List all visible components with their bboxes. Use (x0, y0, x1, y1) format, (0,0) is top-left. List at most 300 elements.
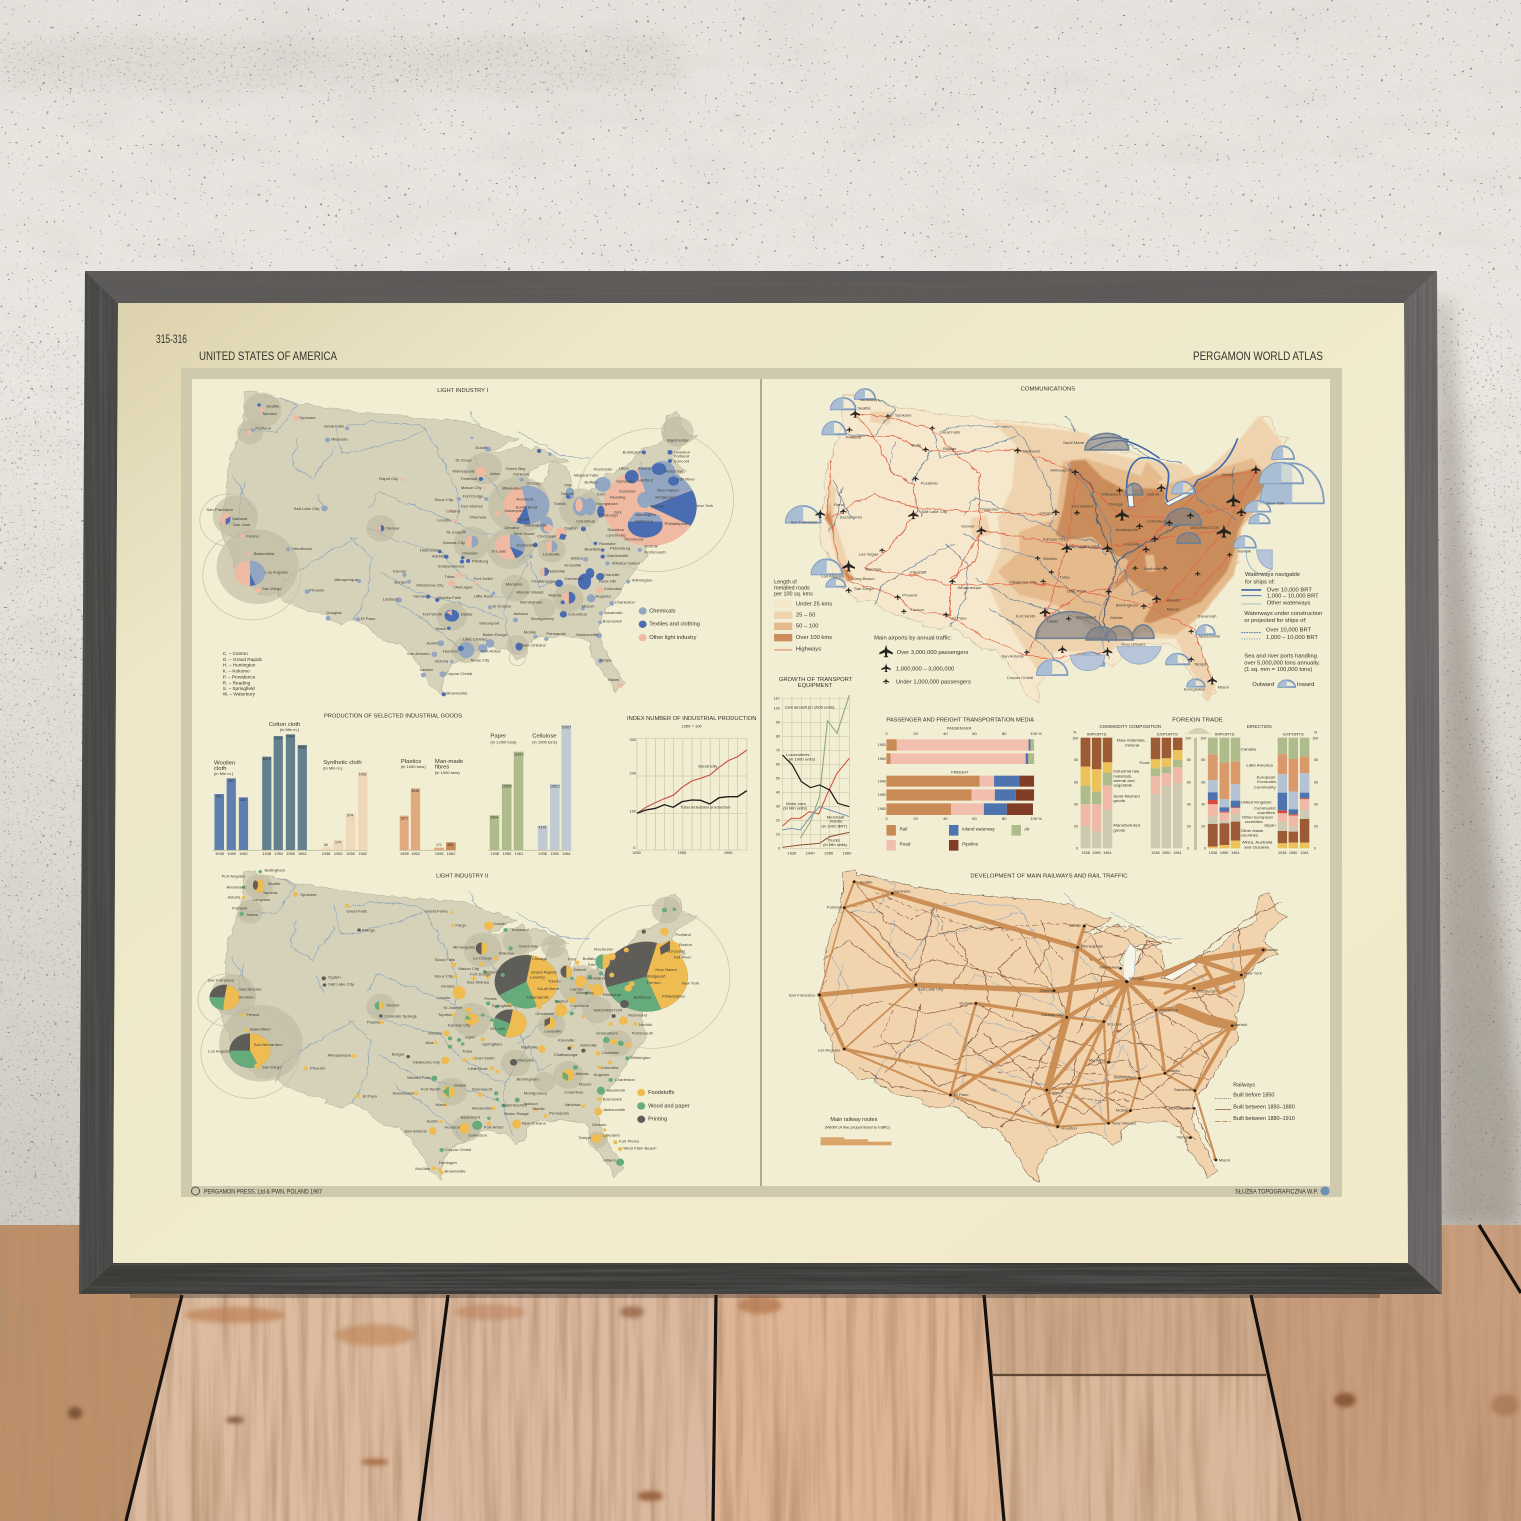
chart: growth of transport equipment: 30 (776, 805, 780, 809)
city labels: Borger (394, 579, 408, 584)
city labels: Oklahoma City (416, 583, 444, 588)
chart: foreign trade: IMPORTS (1215, 732, 1235, 736)
foreign trade labels: European (1257, 775, 1276, 779)
city labels: Lincoln (437, 995, 450, 1000)
city labels: Corpus Christi (446, 671, 472, 676)
legend: waterways: Over 10,000 BRT (1267, 587, 1313, 593)
city labels: Springfield (492, 1003, 511, 1008)
city labels: Bellingham (265, 868, 286, 873)
legend: waterways: or projected for ships of: (1244, 618, 1307, 624)
year labels: 1961 (514, 852, 523, 856)
pie: Baltimore and neighbours (595, 461, 679, 538)
chart: passenger and freight transportation media: 1950 (878, 793, 886, 797)
city labels: St Joseph (443, 1005, 462, 1010)
year labels: 1955 (346, 852, 355, 856)
city labels: Portland (827, 905, 842, 910)
chart: passenger and freight transportation media: Rail (900, 827, 907, 832)
chart: index number of industrial production: INDEX NUMBER OF INDUSTRIAL PRODUCTION (627, 716, 756, 722)
city labels: Columbia (604, 586, 622, 591)
abbreviation key: S. – Springfield (223, 686, 255, 691)
bar series labels: (in 1000 tons) (532, 740, 558, 745)
footer: copyright: PERGAMON PRESS, Ltd & PWN, POLAND 1967 (204, 1190, 323, 1196)
city labels: Kansas City (1041, 1012, 1064, 1017)
city labels: Tacoma (263, 890, 278, 895)
city labels: Reno (834, 502, 845, 507)
city labels: Kansas City (448, 1023, 470, 1028)
city labels: Birmingham (520, 599, 543, 604)
city labels: Dumas (393, 568, 406, 573)
city labels: Richmond (628, 1013, 647, 1018)
bar values: 3548 (411, 789, 419, 793)
chart: growth of transport equipment: 0 (778, 847, 780, 851)
city labels: Fort Dodge (470, 972, 492, 977)
foreign trade labels: 1950 (1289, 851, 1297, 855)
abbreviation key: K. – Kokomo (223, 668, 250, 673)
legend: main railway routes: (Width of line proportional to traffic) (825, 1124, 891, 1129)
city labels: Des Moines (467, 979, 489, 984)
city labels: Knoxville (565, 563, 582, 568)
city labels: Philadelphia (664, 521, 688, 526)
legend: light industry II: Printing (648, 1117, 667, 1123)
foreign trade labels: 100 (1072, 737, 1078, 741)
city labels: Peoria (485, 996, 497, 1001)
chart: index number of industrial production: 1960 (724, 851, 733, 855)
city labels: Sioux Falls (435, 957, 455, 962)
city labels: Texas City (470, 658, 489, 663)
chart: foreign trade (1072, 718, 1318, 855)
city labels: Fresno (246, 534, 260, 539)
bar values: 8889 (298, 746, 306, 750)
city labels: Stockton (238, 994, 255, 999)
chart: foreign trade: COMMODITY COMPOSITION (1100, 724, 1161, 729)
city labels: Charlotte (603, 572, 620, 577)
lake Erie and Ontario white strip (1127, 485, 1196, 507)
city labels: Philadelphia (662, 993, 685, 998)
city labels: Rapid City (379, 476, 398, 481)
city labels: Fargo (455, 923, 467, 928)
city labels: Seattle (858, 406, 872, 410)
city labels: Charlotte (602, 1050, 620, 1055)
year labels: 1955 (286, 852, 295, 856)
year labels: 1950 (550, 852, 559, 856)
city labels: Atlanta (548, 593, 562, 598)
city labels: Des Moines (461, 503, 483, 508)
city labels: Portland (232, 906, 247, 910)
city labels: Wichita (432, 554, 446, 559)
legend: sea and river ports: over 5,000,000 tons annually. (1244, 660, 1321, 666)
city labels: Spokane (895, 413, 912, 418)
city labels: Portland (675, 932, 691, 937)
chart: passenger and freight transportation media: 0 (885, 817, 888, 821)
city labels: Great Falls (940, 430, 960, 434)
city labels: Butte (912, 443, 922, 448)
city labels: Sioux City (434, 973, 453, 978)
city labels: Oklahoma City (413, 1059, 440, 1064)
city labels: Los Angeles (818, 1047, 840, 1052)
map: Development of main railways and rail traffic (789, 870, 1295, 1182)
chart: growth of transport equipment: 70 (776, 749, 780, 753)
rivers (828, 878, 1237, 1141)
city labels: St Louis (491, 549, 506, 554)
city labels: Tampa (578, 1135, 592, 1140)
city labels: Sacramento (840, 514, 863, 519)
chart: growth of transport equipment: GROWTH OF TRANSPORT (779, 677, 853, 683)
foreign trade labels: goods (1113, 798, 1125, 803)
year labels: 1950 (274, 852, 283, 856)
city labels: San Francisco (789, 993, 816, 998)
city labels: Shreveport (479, 620, 500, 625)
chart: growth of transport equipment: Merchant (827, 814, 845, 819)
city labels: Denver (961, 523, 975, 528)
city labels: New Haven (655, 967, 677, 972)
title: railways: DEVELOPMENT OF MAIN RAILWAYS AND RAIL TRAFFIC (970, 874, 1128, 880)
city labels: Green Bay (506, 466, 526, 471)
city labels: New York (695, 503, 713, 508)
city labels: Fresno (246, 1012, 260, 1017)
chart: passenger and freight transportation media: 80 (1002, 817, 1007, 821)
chart: growth of transport equipment: 90 (776, 721, 780, 725)
city labels: Indianapolis (1116, 527, 1138, 532)
city labels: Portland (255, 426, 271, 430)
bar values: 8070 (263, 757, 271, 761)
bar values: 11612 (514, 752, 524, 756)
Lake Michigan over rail lines (1123, 943, 1136, 982)
city labels: Wichita (428, 1031, 443, 1036)
legend: sea and river ports: Outward (1252, 682, 1274, 688)
city labels: Columbus (1147, 518, 1166, 523)
city labels: Douglas (326, 610, 342, 615)
city labels: Corpus Christi (1007, 675, 1033, 680)
city labels: Worcester (666, 949, 686, 953)
pie: St Louis (495, 534, 525, 559)
city labels: South Bend (515, 504, 537, 509)
year labels: 1950 (334, 852, 343, 856)
year labels: 1938 (538, 852, 547, 856)
city labels: Little Rock (1067, 588, 1086, 593)
road density: over 100 km (825, 460, 1272, 623)
chart: growth of transport equipment: (in 1000 BRT) (821, 823, 848, 828)
bar series labels: Cellulose (532, 734, 557, 740)
legend: road density: metalled roads (774, 585, 810, 591)
chart: foreign trade: EXPORTS (1283, 732, 1304, 736)
chart: foreign trade: DIRECTION (1247, 724, 1272, 729)
bars: paper (490, 752, 523, 850)
city labels: El Paso (361, 616, 376, 621)
background: wooden floor (0, 1225, 1521, 1521)
city labels: Milwaukee (1100, 965, 1120, 969)
city labels: Baltimore (635, 519, 654, 524)
chart: index number of industrial production: 0 (633, 846, 635, 850)
city labels: Buffalo (583, 956, 596, 961)
city labels: Baton Rouge (483, 632, 508, 637)
city labels: Toledo (554, 501, 567, 506)
chart: index number of industrial production: 1950 = 100 (681, 724, 702, 729)
legend: waterways: Waterways navigable (1245, 572, 1300, 578)
footer: cartographic service (1235, 1186, 1330, 1196)
pie: Chicago (503, 486, 549, 524)
city labels: Houston (445, 1125, 460, 1130)
city labels: Birmingham (1116, 603, 1139, 608)
chart: passenger and freight transportation media: PASSENGER (947, 726, 972, 730)
chart: index number of industrial production: 300 (630, 738, 636, 742)
foreign trade labels: Africa, Australia (1242, 839, 1273, 844)
city labels: Brunswick (603, 1097, 622, 1102)
abbreviation key: W. – Waterbury (223, 692, 256, 697)
city labels: Utica (619, 466, 629, 470)
chart: growth of transport equipment: 1930 (788, 851, 796, 855)
city labels: Salt Lake City (921, 509, 947, 514)
city labels: Topeka (438, 1012, 452, 1017)
foreign trade labels: Semi-finished (1113, 793, 1140, 798)
city labels: Miami (605, 1158, 616, 1163)
city labels: Phoenix (902, 592, 918, 597)
frame (79, 271, 1442, 1294)
city labels: Wilmington (630, 1055, 651, 1060)
regional background disks (211, 874, 681, 1149)
foreign trade labels: Community (1254, 784, 1277, 789)
legend: main railway routes (821, 1117, 892, 1145)
city labels: Chicago (532, 956, 548, 961)
city labels: Jacksonville (575, 632, 599, 637)
chart: growth of transport equipment: 60 (776, 763, 780, 767)
year labels: 1938 (322, 852, 330, 856)
city labels: El Paso (954, 1092, 969, 1097)
foreign trade labels: 1938 (1081, 851, 1090, 855)
city labels: Albuquerque (334, 577, 359, 582)
city labels: Canton (570, 987, 583, 992)
city labels: San Antonio (407, 651, 430, 656)
city labels: Little Rock (474, 594, 493, 599)
legend: road density: Length of (774, 579, 797, 585)
title: Light Industry I: LIGHT INDUSTRY I (437, 388, 488, 394)
bar values: 172 (436, 843, 442, 847)
pies: smaller centres (253, 879, 681, 1166)
city labels: Buffalo (585, 480, 598, 484)
bar values: 281 (240, 798, 246, 802)
city labels: St Cloud (455, 458, 471, 463)
city labels: Little Rock (468, 1066, 488, 1071)
city labels: Milwaukee (502, 485, 522, 490)
grey overlap ports (1036, 433, 1201, 640)
city labels: Oklahoma City (1009, 579, 1037, 584)
pie: Los Angeles (229, 1033, 271, 1068)
chart: index number of industrial production: 100 (630, 809, 636, 813)
city labels: New Orleans (522, 1120, 546, 1125)
chart: index number of industrial production: Electricity (698, 764, 718, 769)
foreign trade labels: 1938 (1209, 851, 1217, 855)
city labels: Corpus Christi (445, 1147, 471, 1152)
chart: passenger and freight transportation media: 100 % (1030, 817, 1042, 821)
legend: sea and river ports: Sea and river ports handling (1244, 654, 1317, 660)
city labels: Minneapolis (1081, 944, 1103, 948)
city labels: Bridgeport (646, 973, 666, 978)
foreign trade labels: 100 (1185, 737, 1191, 741)
city labels: Syracuse (616, 479, 634, 483)
pie: New York region (605, 942, 688, 1012)
city labels: New York (682, 981, 699, 986)
legend: light industry II: Foodstuffs (648, 1090, 675, 1096)
city labels: Dallas (461, 612, 472, 617)
Mississippi and Ohio dark channels (1067, 472, 1180, 642)
chart: passenger and freight transportation media: 1940 (878, 779, 886, 783)
foreign trade labels: materials, (1113, 774, 1132, 778)
city labels: Albuquerque (327, 1053, 352, 1058)
city labels: Harlingen (439, 1160, 457, 1165)
bar values: 4175 (539, 826, 546, 830)
legend: railways built by period (1215, 1083, 1295, 1122)
legend: sea and river ports: (1 sq. mm = 100,000 tons) (1244, 667, 1312, 673)
title: production of selected industrial goods: PRODUCTION OF SELECTED INDUSTRIAL GOODS (324, 714, 462, 720)
city labels: Mobile (1110, 615, 1124, 620)
legend: light industry I: Other light industry (649, 635, 697, 641)
city labels: Worcester (664, 469, 684, 473)
pie: New York region (603, 467, 697, 546)
city labels: Detroit (574, 967, 587, 972)
city labels: Greensboro (596, 1030, 619, 1035)
city labels: Petersburg (610, 545, 630, 550)
map base: USA outline (819, 393, 1289, 703)
city labels: Omaha (446, 508, 461, 513)
legend: road density: 50 – 100 (796, 624, 819, 630)
foreign trade labels: United Kingdom (1241, 800, 1272, 805)
city labels: La Crosse (473, 956, 493, 960)
lower half port circles (1070, 550, 1272, 671)
city labels: Savannah (1174, 1087, 1193, 1092)
city labels: Phoenix (309, 588, 324, 593)
city labels: Tacoma (262, 411, 277, 416)
foreign trade labels: 1961 (1103, 851, 1112, 855)
city labels: Martinsville (607, 553, 629, 558)
foreign trade labels: 20 (1187, 825, 1191, 829)
city labels: Rock Hill (599, 578, 616, 583)
city labels: Portland (846, 435, 861, 439)
bar series labels: (in 1,000 tons) (490, 740, 517, 745)
chart: growth of transport equipment: 1950 (824, 851, 833, 855)
lighter patches inside dense zone (1070, 555, 1156, 582)
city labels: Savannah (606, 1088, 625, 1093)
city labels: Mason City (461, 485, 482, 490)
city labels: Cincinnati (535, 1011, 554, 1016)
bar series labels (214, 722, 558, 776)
city labels: New York (1244, 971, 1262, 976)
bar values: 1452 (359, 772, 367, 776)
city labels: Jacksonville (603, 1107, 626, 1112)
city labels: Dayton (565, 525, 578, 530)
city labels: Indianapolis (526, 994, 549, 999)
foreign trade labels: Raw materials, (1117, 738, 1146, 743)
city labels: Norfolk (1238, 549, 1251, 554)
legend: light industry I: Chemicals (649, 608, 676, 614)
legend: airports (874, 635, 971, 686)
city labels: Bluefield (585, 547, 601, 552)
city labels: El Dorado (493, 604, 512, 609)
city labels: Nashville (1144, 566, 1162, 571)
city labels: New Orleans (1112, 1120, 1136, 1125)
foreign trade labels: 20 (1074, 825, 1078, 829)
city labels: Toledo (548, 978, 561, 983)
city labels: San Antonio (405, 1129, 428, 1134)
halos around major centres (198, 905, 730, 1098)
city labels: Tucson (910, 607, 924, 612)
city labels: Burlington (623, 450, 641, 454)
city labels: Fort Worth (423, 612, 442, 617)
city labels: Okmulgee (454, 584, 473, 589)
chart: foreign trade: FOREIGN TRADE (1172, 718, 1223, 724)
city labels: Richmond (625, 537, 643, 542)
foreign trade labels: 80 (1074, 758, 1078, 762)
legend: main railway routes: Main railway routes (830, 1117, 878, 1123)
foreign trade labels: countries (1241, 833, 1258, 838)
city labels: Billings (362, 928, 375, 933)
chart: passenger and freight transportation media: 20 (913, 817, 918, 821)
year labels: 1961 (562, 852, 571, 856)
direction imports columns (1208, 738, 1240, 848)
city labels: Mobile (1116, 1108, 1129, 1113)
dashed later railways (852, 892, 1212, 1113)
city labels: Orlando (592, 1122, 607, 1127)
city labels: Manchester (667, 438, 690, 443)
city labels (206, 404, 713, 695)
city labels: Seattle (267, 881, 281, 886)
bar values: 10560 (502, 785, 512, 789)
city labels: Valdosta (565, 1102, 581, 1107)
city labels: San Francisco (207, 978, 235, 983)
foreign trade labels: 1938 (1151, 851, 1160, 855)
city labels: Pittsburgh (603, 992, 621, 997)
city labels: Minneapolis (453, 469, 475, 474)
legend: light industry I (639, 607, 700, 641)
city labels: Augusta (595, 594, 612, 599)
rivers (828, 401, 1237, 663)
chart: index number of industrial production: 200 (630, 772, 636, 776)
foreign trade labels: 80 (1314, 758, 1318, 762)
map base: USA outline (221, 390, 697, 695)
bar values: 60 (324, 843, 328, 847)
city labels: Kansas City (443, 540, 465, 545)
map: Communications (774, 387, 1324, 703)
chart: growth of transport equipment: (in Mln units) (783, 805, 808, 810)
chart: growth of transport equipment: Motor cars (786, 801, 806, 806)
year labels: 1962 (298, 852, 307, 856)
bar series labels: Paper (490, 734, 506, 740)
legend: road density: per 100 sq. kms (774, 592, 813, 598)
city labels: Scranton (619, 489, 636, 494)
city labels: Port Angeles (222, 874, 245, 878)
city labels: Davenport (505, 508, 525, 513)
chart: growth of transport equipment: 80 (776, 735, 780, 739)
city labels: Wichita (1043, 556, 1058, 561)
chart: growth of transport equipment: 10 (776, 833, 780, 837)
chart: index number of industrial production: 1955 (678, 851, 686, 855)
city labels: Birmingham (1114, 1074, 1137, 1079)
city labels: Faribault (461, 476, 478, 481)
city labels: Portland (674, 454, 689, 458)
year labels: 1950 (503, 852, 511, 856)
city labels: Natchitoches (503, 1103, 527, 1108)
foreign trade labels: 60 (1314, 780, 1318, 784)
bar series labels: (in 1000 tons) (435, 770, 460, 775)
foreign trade labels: Industrial raw (1113, 769, 1140, 774)
city labels: Denver (960, 1000, 974, 1005)
chart: growth of transport equipment: 100 (774, 707, 780, 711)
page number: 315-316 (156, 334, 187, 346)
main traffic routes (820, 882, 1263, 1160)
city labels: Concord (674, 459, 689, 464)
city labels: Evansville (517, 543, 536, 548)
bar series labels: Woollen (214, 761, 235, 766)
legend: road density (774, 579, 832, 652)
bars: synthetic cloth (321, 772, 368, 850)
